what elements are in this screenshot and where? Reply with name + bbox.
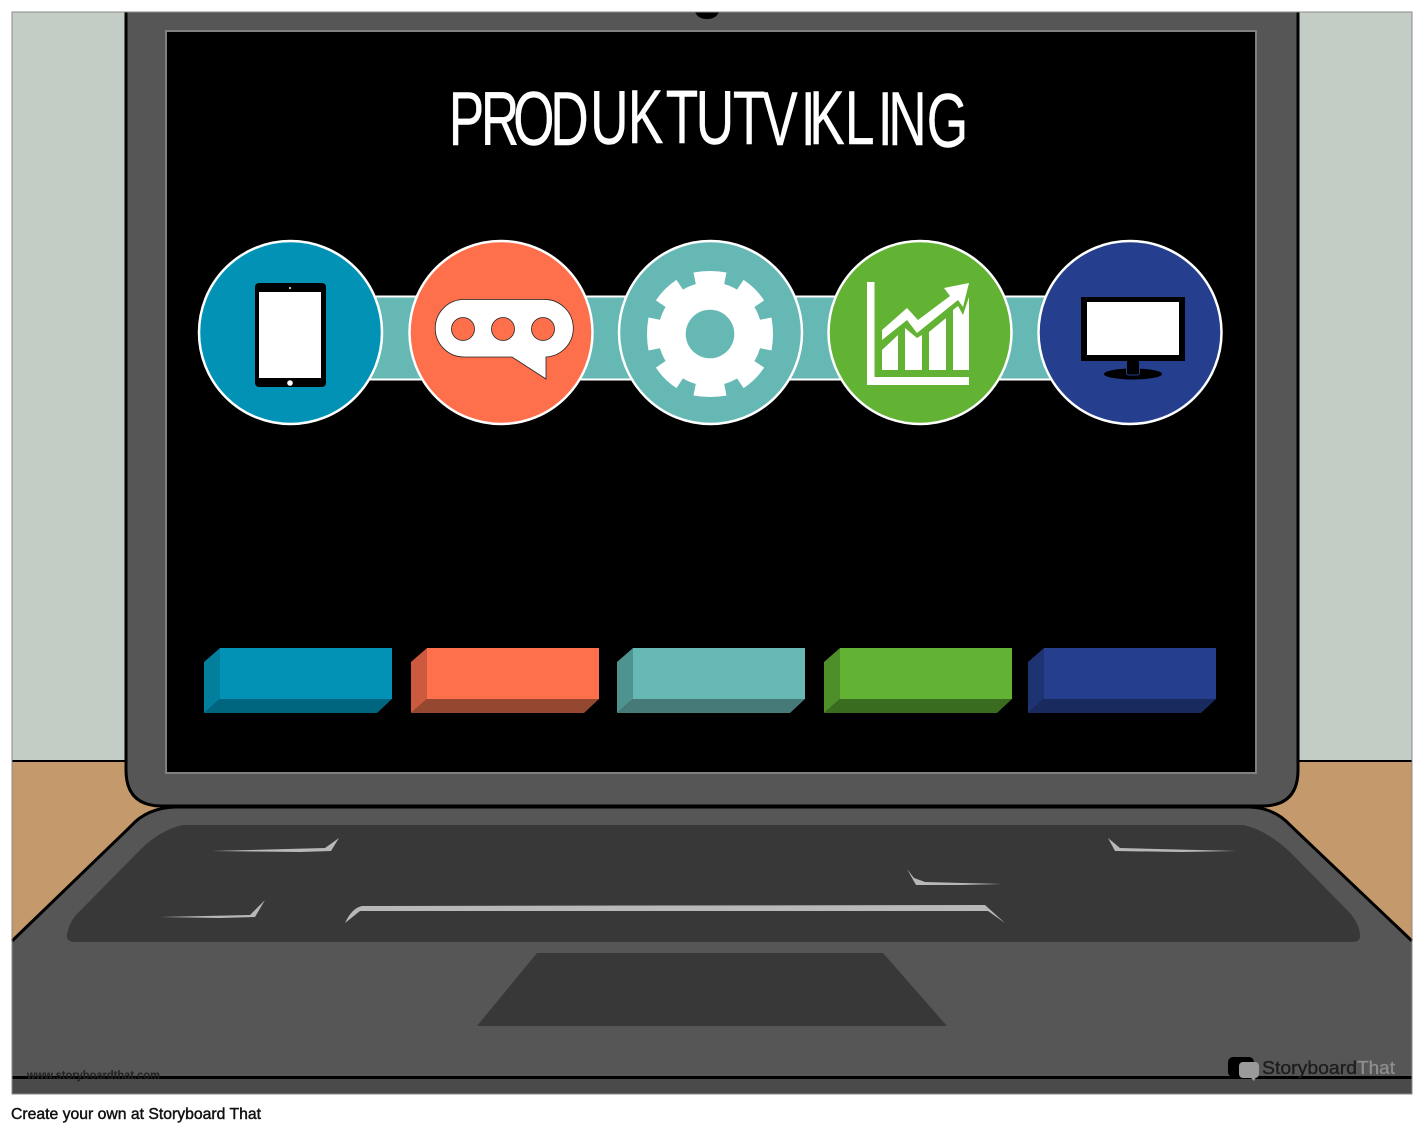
icon: growth chart — [867, 282, 969, 385]
storyboard that logo: Storyboard — [1262, 1058, 1357, 1078]
step 2: speech bubble circle — [410, 241, 592, 424]
block 2: orange — [411, 648, 599, 713]
step 1: tablet circle — [199, 241, 382, 424]
laptop lid — [126, 12, 1298, 806]
keyboard area — [67, 825, 1360, 942]
block 5: navy — [1028, 648, 1216, 713]
icon: monitor — [1081, 297, 1185, 380]
keyboard highlights — [160, 838, 1236, 923]
touchpad — [477, 953, 947, 1026]
storyboard that logo — [1228, 1057, 1395, 1081]
icon: tablet — [255, 283, 326, 387]
laptop base — [12, 807, 1412, 1094]
laptop screen — [166, 31, 1256, 773]
footer credit: Create your own at Storyboard That — [11, 1106, 262, 1123]
step 3: gear circle — [619, 241, 802, 424]
block 3: teal — [617, 648, 805, 713]
block 1: blue — [204, 648, 392, 713]
block 4: green — [824, 648, 1012, 713]
title: PRODUKTUTVIKLING — [449, 75, 968, 163]
connecting band — [365, 296, 1055, 380]
watermark url: www.storyboardthat.com — [26, 1068, 160, 1082]
icon: gear — [647, 271, 773, 397]
storyboard that logo: That — [1357, 1058, 1395, 1078]
step 4: growth chart circle — [828, 241, 1012, 424]
webcam notch — [695, 12, 719, 19]
icon: speech bubble — [435, 299, 573, 379]
step 5: monitor circle — [1038, 241, 1222, 424]
